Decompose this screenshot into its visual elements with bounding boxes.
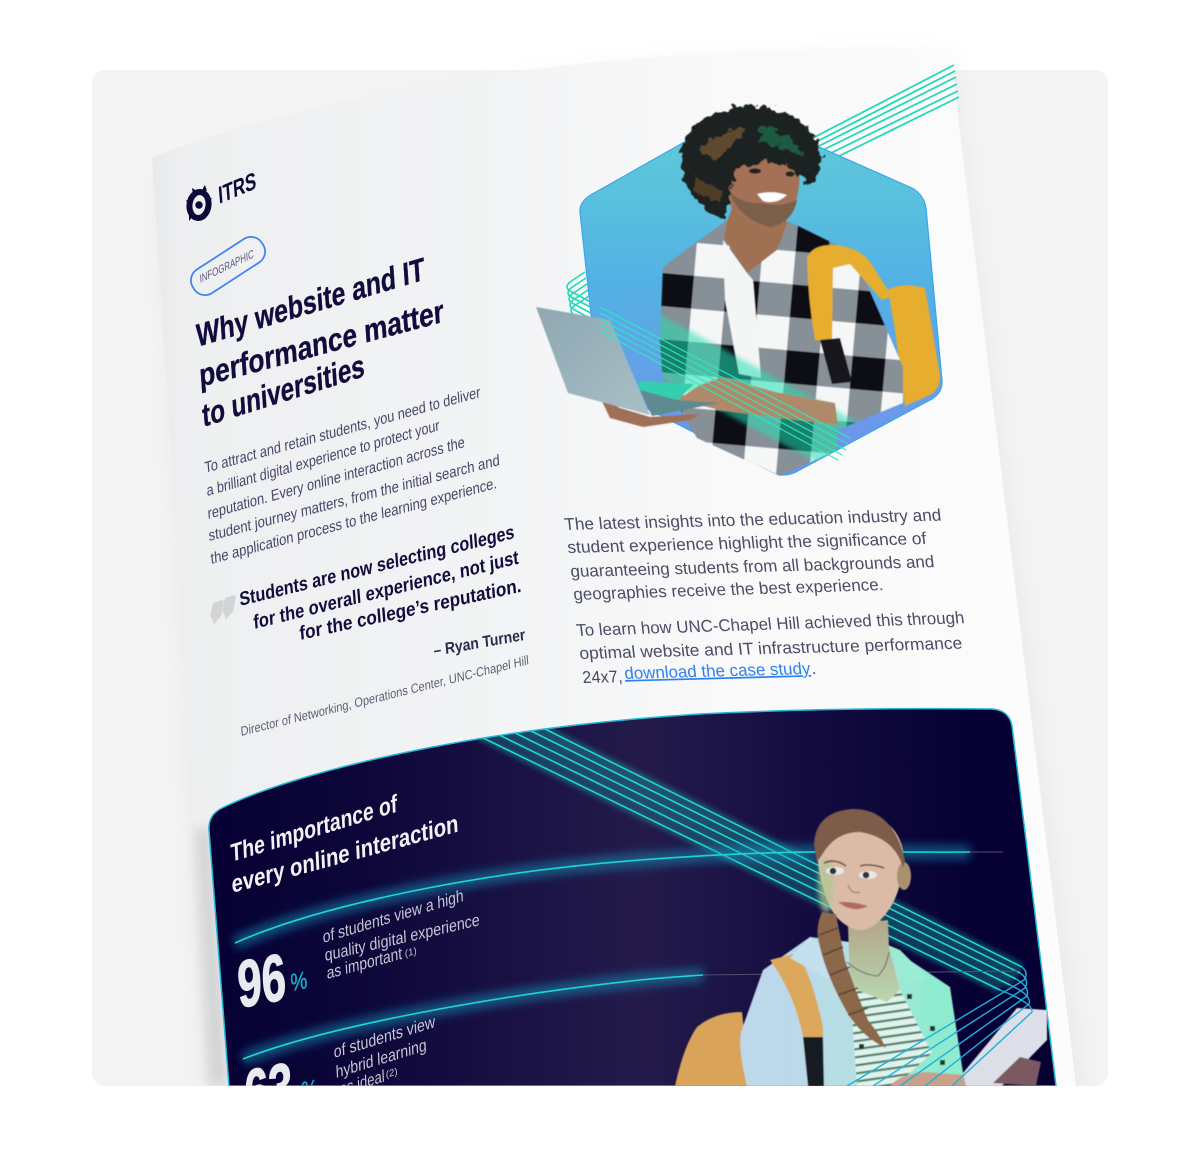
intro paragraph [204, 384, 500, 568]
photo: student with tablet [675, 809, 1047, 1086]
stat: 96 percent: of students view a high [322, 886, 464, 947]
jacket [740, 937, 965, 1086]
hair [680, 106, 821, 220]
body copy: insights: guaranteeing students from all backgrounds and [569, 552, 935, 581]
progress line 1 [235, 852, 1003, 943]
teal tint [640, 335, 860, 455]
intro paragraph: To attract and retain students, you need to deliver [204, 384, 481, 477]
intro paragraph: the application process to the learning experience. [210, 475, 498, 568]
brochure page [152, 50, 1086, 1131]
dark panel [208, 708, 1057, 1086]
decorative lines: panel return [847, 967, 1032, 1086]
quote attribution: Director of Networking, Operations Center, UNC-Chapel Hill [240, 652, 529, 739]
braid [818, 912, 886, 1048]
body copy: case study: optimal website and IT infrastructure performance [578, 634, 963, 663]
stat: 96 percent: as important [326, 944, 403, 983]
stat: 96 percent: quality digital experience [324, 910, 480, 965]
body copy: insights [563, 506, 942, 604]
body copy: case study [575, 608, 965, 687]
stat: 63 percent [246, 1018, 435, 1086]
stat: 96 percent: 96 [235, 939, 288, 1022]
laptop [638, 381, 694, 400]
intro paragraph: reputation. Every online interaction across the [207, 434, 465, 523]
body copy: case study: 24x7, [581, 667, 623, 687]
decorative lines: top right [807, 65, 959, 158]
jacket collar [790, 937, 852, 992]
tag: infographic [190, 236, 266, 296]
title [195, 250, 445, 434]
strap buckle [820, 338, 852, 384]
tablet and hands [890, 1072, 978, 1086]
striped top [850, 987, 932, 1086]
decorative lines: panel forward [473, 725, 1022, 990]
body copy: insights: geographies receive the best experience. [572, 575, 884, 604]
stat: 63 percent: 63 [242, 1048, 295, 1131]
body copy: case study: download the case study [623, 659, 812, 683]
logo wordmark: ITRS [217, 167, 257, 210]
pull quote: for the overall experience, not just [253, 546, 520, 634]
body copy: insights: student experience highlight the significance of [566, 529, 928, 557]
quote attribution: – Ryan Turner [433, 626, 526, 660]
stat: 96 percent: (1) [405, 946, 417, 960]
progress line 2 [243, 971, 1020, 1059]
eyes and mouth [824, 861, 884, 909]
pull quote: Students are now selecting colleges [239, 521, 515, 611]
photo: student with laptop [536, 106, 940, 476]
pull quote: for the college’s reputation. [299, 575, 522, 645]
panel heading: every online interaction [231, 809, 459, 899]
hands and arms [677, 377, 838, 425]
stat: 63 percent: of students view [333, 1012, 436, 1062]
face [817, 815, 903, 930]
stat: 63 percent: as ideal [339, 1066, 385, 1099]
title: performance matter [198, 293, 445, 394]
backpack strap [770, 953, 823, 1037]
stat: 96 percent [238, 890, 479, 1008]
body copy: insights: The latest insights into the education industry and [563, 506, 942, 534]
icon: quote mark [210, 595, 236, 625]
decorative lines: overlay on student [600, 307, 850, 460]
jacket buttons [859, 994, 945, 1065]
title: to universities [201, 347, 366, 434]
body copy: case study: . [810, 659, 817, 678]
icon: gear logo [186, 185, 212, 221]
face [728, 158, 800, 208]
necklace [847, 952, 889, 976]
backpack strap [807, 245, 892, 342]
stat: 96 percent: % [290, 967, 308, 997]
title: Why website and IT [195, 250, 426, 354]
decorative lines: left hook [566, 271, 590, 318]
stat: 63 percent: % [301, 1075, 319, 1105]
backpack [888, 285, 940, 406]
intro paragraph: student journey matters, from the initial search and [208, 452, 500, 545]
panel heading: The importance of [230, 789, 398, 868]
neck [724, 205, 787, 273]
shirt [660, 220, 903, 476]
stat: 63 percent: hybrid learning [335, 1035, 427, 1082]
backpack [675, 1012, 750, 1086]
intro paragraph: a brilliant digital experience to protect your [206, 417, 440, 500]
neck [848, 920, 900, 1002]
tag: infographic: INFOGRAPHIC [199, 248, 254, 286]
hair [814, 809, 905, 868]
stat: 63 percent: (2) [386, 1066, 398, 1081]
t-shirt [723, 240, 761, 378]
body copy: case study: To learn how UNC-Chapel Hill achieved this through [575, 608, 965, 640]
logo: ITRS [186, 173, 256, 221]
hexagon photo background [580, 116, 942, 475]
background card [92, 70, 1108, 1086]
